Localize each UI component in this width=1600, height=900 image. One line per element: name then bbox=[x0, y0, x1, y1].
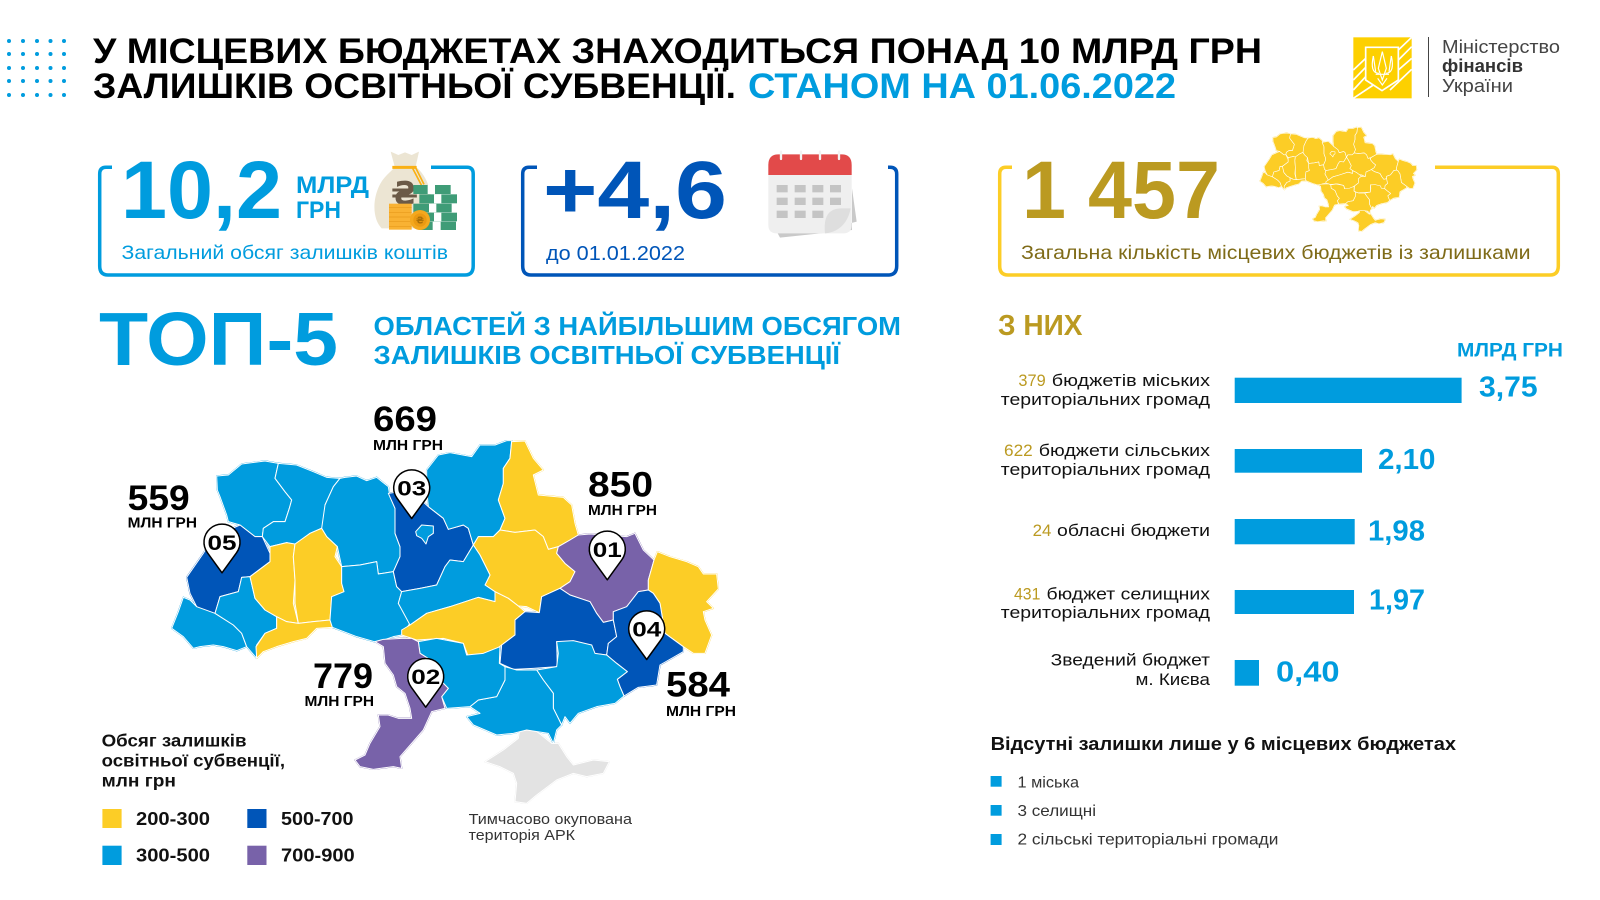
row: settlement communities bbox=[1001, 584, 1425, 622]
pin 02 bbox=[408, 659, 444, 707]
caption: до 01.01.2022 bbox=[546, 242, 685, 265]
caption: Загальна кількість місцевих бюджетів із залишками bbox=[1021, 242, 1531, 264]
unit label: МЛРД ГРН bbox=[1457, 340, 1563, 362]
legend title: освітньої субвенції, bbox=[102, 751, 285, 771]
unit bbox=[296, 172, 369, 224]
logo text bbox=[1442, 37, 1560, 96]
row: rural communities: 2,10 bbox=[1378, 444, 1436, 476]
subheading bbox=[374, 311, 901, 370]
title: СТАНОМ НА 01.06.2022 bbox=[748, 67, 1176, 106]
caption: Загальний обсяг залишків коштів bbox=[122, 242, 448, 264]
divider bbox=[1428, 37, 1429, 97]
note: occupied territory: Тимчасово окупована bbox=[469, 811, 633, 828]
subheading: ЗАЛИШКІВ ОСВІТНЬОЇ СУБВЕНЦІЇ bbox=[374, 340, 841, 370]
row: regional budgets: 24 bbox=[1033, 521, 1051, 540]
big number: 10,2 bbox=[121, 145, 282, 236]
unit: МЛРД bbox=[296, 172, 369, 199]
legend labels: 700-900 bbox=[281, 846, 355, 866]
row: city communities: 3,75 bbox=[1479, 372, 1538, 404]
value label 559 bbox=[128, 479, 197, 532]
bar chart: balances by budget type bbox=[1001, 340, 1563, 689]
legend labels: 200-300 bbox=[136, 809, 210, 829]
heading: top 5 bbox=[99, 297, 901, 381]
icon: money bag bbox=[374, 152, 457, 230]
legend labels: 300-500 bbox=[136, 846, 210, 866]
row: settlement communities: бюджет селищних bbox=[1046, 584, 1211, 603]
logo text: Міністерство bbox=[1442, 37, 1560, 57]
pin 01: 01 bbox=[593, 539, 622, 562]
row: city communities: територіальних громад bbox=[1001, 390, 1210, 409]
list item: city bbox=[991, 774, 1079, 791]
panel: number of budgets bbox=[1000, 127, 1558, 275]
row: Kyiv: Зведений бюджет bbox=[1051, 651, 1210, 670]
pin 04 bbox=[629, 611, 665, 660]
legend labels: 500-700 bbox=[281, 809, 354, 829]
decorative dot grid icon bbox=[7, 39, 66, 97]
map: Ukraine regions with pins bbox=[128, 400, 736, 803]
pin 03 bbox=[394, 470, 430, 518]
row: city communities: бюджетів міських bbox=[1052, 371, 1211, 390]
row: Kyiv bbox=[1051, 651, 1340, 689]
row: regional budgets: 1,98 bbox=[1368, 516, 1425, 548]
title bbox=[93, 32, 1262, 106]
value label 559: МЛН ГРН bbox=[128, 516, 197, 532]
row: city communities bbox=[1001, 371, 1538, 409]
icon: calendar bbox=[768, 152, 857, 238]
row: settlement communities: 431 bbox=[1014, 584, 1040, 603]
legend title: млн грн bbox=[102, 771, 176, 791]
icon: trident emblem bbox=[1353, 37, 1412, 98]
legend swatches bbox=[102, 809, 267, 865]
list item: city: 1 міська bbox=[1018, 774, 1079, 791]
row: Kyiv: 0,40 bbox=[1276, 657, 1340, 689]
logo: Ministry of Finance of Ukraine bbox=[1353, 37, 1560, 98]
value label 779: 779 bbox=[313, 657, 373, 696]
icon: small Ukraine map bbox=[1260, 127, 1417, 231]
icon: money bag: ₴ bbox=[416, 215, 424, 226]
row: Kyiv: м. Києва bbox=[1136, 670, 1211, 689]
row: city communities: 379 bbox=[1018, 371, 1046, 390]
block heading: Відсутні залишки лише у 6 місцевих бюджетах bbox=[991, 734, 1456, 754]
value label 850 bbox=[588, 466, 657, 519]
row: regional budgets bbox=[1033, 516, 1425, 548]
subheading: ОБЛАСТЕЙ З НАЙБІЛЬШИМ ОБСЯГОМ bbox=[374, 311, 901, 341]
list item: rural: 2 сільські територіальні громади bbox=[1018, 831, 1278, 848]
value label 584 bbox=[666, 666, 736, 720]
value label 559: 559 bbox=[128, 479, 190, 518]
icon: money bag: ₴ bbox=[391, 176, 418, 212]
legend labels bbox=[136, 809, 355, 866]
value label 669: МЛН ГРН bbox=[373, 438, 443, 454]
block: budgets with no balances bbox=[991, 734, 1456, 848]
logo text: України bbox=[1442, 76, 1513, 96]
legend title bbox=[102, 731, 285, 791]
big number: +4,6 bbox=[543, 145, 727, 236]
value label 779 bbox=[304, 657, 374, 710]
panel: total amount bbox=[100, 145, 473, 275]
value label 669: 669 bbox=[373, 400, 437, 439]
legend bbox=[102, 731, 355, 866]
heading: top 5: ТОП-5 bbox=[99, 297, 338, 381]
title: У МІСЦЕВИХ БЮДЖЕТАХ ЗНАХОДИТЬСЯ ПОНАД 10 МЛРД ГРН bbox=[93, 32, 1262, 71]
list item: settlement bbox=[991, 803, 1096, 820]
pin 04: 04 bbox=[632, 618, 662, 642]
big number: 1 457 bbox=[1022, 145, 1220, 236]
logo text: фінансів bbox=[1442, 56, 1523, 76]
row: rural communities: бюджети сільських bbox=[1039, 441, 1211, 460]
value label 850: 850 bbox=[588, 466, 653, 505]
unit: ГРН bbox=[296, 197, 341, 224]
row: rural communities: територіальних громад bbox=[1001, 460, 1210, 479]
heading: of them: З НИХ bbox=[998, 310, 1083, 342]
row: settlement communities: територіальних громад bbox=[1001, 603, 1210, 622]
row: settlement communities: 1,97 bbox=[1369, 584, 1425, 616]
row: rural communities bbox=[1001, 441, 1436, 479]
pin 05 bbox=[204, 524, 240, 573]
row: rural communities: 622 bbox=[1004, 441, 1033, 460]
note: occupied territory: територія АРК bbox=[469, 827, 575, 844]
panel: increase bbox=[523, 145, 897, 275]
pin 03: 03 bbox=[397, 478, 426, 500]
title: ЗАЛИШКІВ ОСВІТНЬОЇ СУБВЕНЦІЇ. bbox=[93, 67, 736, 106]
pin 02: 02 bbox=[411, 666, 440, 689]
value label 850: МЛН ГРН bbox=[588, 503, 657, 519]
pin 01 bbox=[589, 531, 625, 580]
legend title: Обсяг залишків bbox=[102, 731, 247, 751]
value label 779: МЛН ГРН bbox=[304, 694, 374, 710]
row: regional budgets: обласні бюджети bbox=[1057, 521, 1210, 540]
value label 584: МЛН ГРН bbox=[666, 704, 736, 720]
note: occupied territory bbox=[469, 811, 633, 844]
value label 669 bbox=[373, 400, 443, 454]
pin 05: 05 bbox=[208, 532, 237, 555]
list item: settlement: 3 селищні bbox=[1018, 803, 1096, 820]
value label 584: 584 bbox=[666, 666, 731, 705]
